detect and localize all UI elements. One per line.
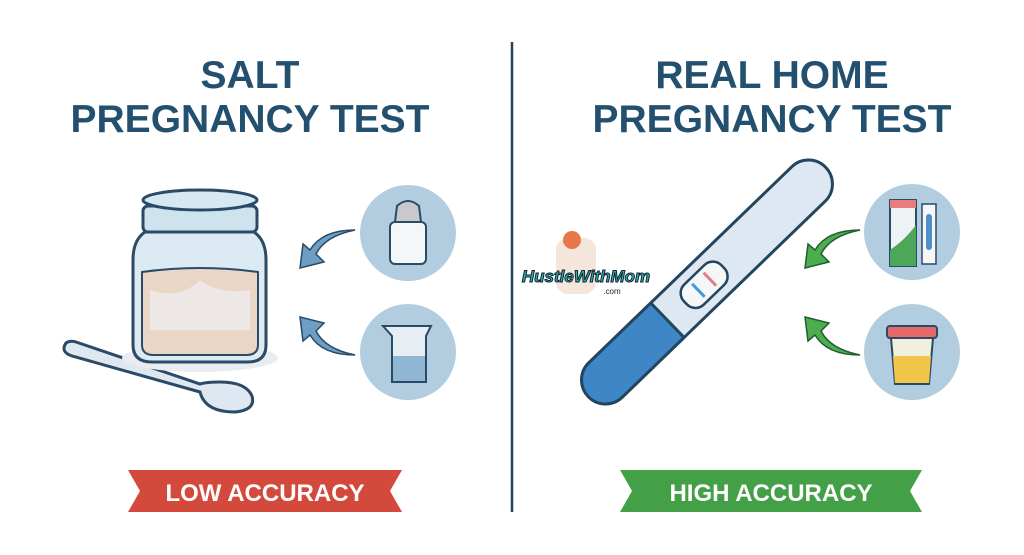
arrow: kit to test	[805, 230, 860, 268]
title: salt pregnancy test: PREGNANCY TEST	[70, 98, 430, 141]
icon: test kit box circle	[864, 184, 960, 280]
arrow: salt to jar	[300, 230, 355, 268]
icon: beaker circle	[360, 304, 456, 400]
title: real home pregnancy test	[592, 54, 952, 141]
title: salt pregnancy test: SALT	[201, 54, 300, 97]
title: real home pregnancy test: REAL HOME	[655, 54, 889, 97]
icon: pregnancy test stick	[572, 150, 842, 414]
title: real home pregnancy test: PREGNANCY TEST	[592, 98, 952, 141]
title: salt pregnancy test	[70, 54, 430, 141]
icon: salt shaker circle	[360, 185, 456, 281]
logo: HustleWithMom: HustleWithMom	[522, 267, 650, 286]
logo: HustleWithMom	[522, 231, 650, 296]
arrow: water to jar	[300, 317, 355, 355]
icon: urine cup circle	[864, 304, 960, 400]
arrow: cup to test	[805, 317, 860, 355]
icon: spoon	[64, 341, 253, 412]
icon: jar with salt water	[122, 190, 278, 372]
banner: high accuracy	[620, 470, 922, 512]
logo: HustleWithMom: .com	[603, 287, 621, 296]
banner: low accuracy: LOW ACCURACY	[165, 480, 365, 507]
banner: low accuracy	[128, 470, 402, 512]
banner: high accuracy: HIGH ACCURACY	[669, 480, 873, 507]
